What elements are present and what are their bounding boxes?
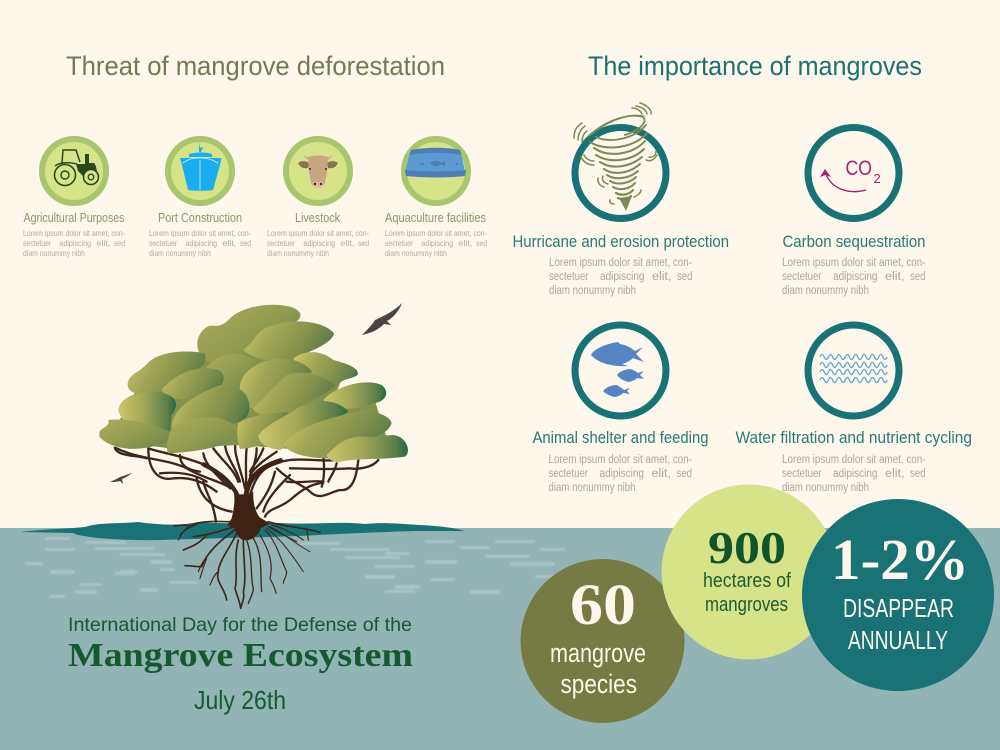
body text: Lorem ipsum dolor sit amet, con- (782, 454, 926, 466)
stat: 1-2% disappear annually: DISAPPEAR (843, 593, 954, 623)
body text (782, 454, 926, 494)
heading: Hurricane and erosion protection (512, 232, 729, 251)
body text (782, 257, 926, 297)
body text: sed (676, 468, 692, 480)
body text: sectetuer (548, 468, 588, 480)
body text: adipiscing (600, 468, 644, 480)
importance: animal shelter (532, 325, 708, 494)
stat: 1-2% disappear annually (802, 499, 994, 691)
body text: sed (910, 468, 926, 480)
stat: 1-2% disappear annually: 1-2% (831, 527, 969, 592)
body text: diam nonummy nibh (267, 248, 329, 258)
icon: cow (286, 139, 350, 203)
body text (549, 257, 692, 297)
body text: diam nonummy nibh (782, 482, 869, 494)
body text: adipiscing (833, 271, 878, 283)
bird: large (362, 303, 402, 335)
heading: Carbon sequestration (782, 232, 926, 251)
body text: Lorem ipsum dolor sit amet, con- (267, 228, 369, 238)
body text: sed (677, 271, 692, 283)
trunk and root crown (227, 492, 270, 540)
body text: diam nonummy nibh (149, 248, 211, 258)
body text: adipiscing (600, 271, 644, 283)
body text: sectetuer (549, 271, 589, 283)
body text: elit, (96, 238, 110, 248)
body text: diam nonummy nibh (385, 248, 447, 258)
stat: 60 mangrove species (520, 559, 684, 723)
body text: Lorem ipsum dolor sit amet, con- (23, 228, 125, 238)
body text: diam nonummy nibh (23, 248, 85, 258)
body text: elit, (652, 271, 672, 283)
body text: elit, (458, 238, 472, 248)
event title: International Day for the Defense of the (68, 614, 412, 636)
event title (68, 614, 413, 715)
body text (267, 228, 369, 258)
body text (23, 228, 125, 258)
body text: sectetuer (385, 238, 413, 248)
mangrove tree illustration (99, 305, 408, 608)
threat: agricultural purposes (23, 139, 125, 258)
importance: hurricane (512, 103, 729, 297)
teal shoreline (20, 522, 465, 540)
body text: diam nonummy nibh (549, 285, 636, 297)
icon: ring and fish (575, 325, 666, 416)
body text: adipiscing (59, 238, 91, 248)
canopy (99, 305, 408, 462)
body text: elit, (340, 238, 354, 248)
body text: sed (114, 238, 125, 248)
title: importance: The importance of mangroves (588, 51, 922, 81)
branches (115, 438, 378, 522)
stat: 1-2% disappear annually: ANNUALLY (848, 625, 948, 655)
stat: 900 hectares: hectares of (703, 570, 791, 592)
stat: 60 mangrove species: species (560, 669, 637, 699)
threat: livestock (267, 139, 369, 258)
body text: sectetuer (267, 238, 295, 248)
icon: ring and CO2 arrow: CO (846, 157, 872, 180)
body text (548, 454, 692, 494)
body text: elit, (885, 271, 904, 283)
body text (149, 228, 251, 258)
heading: Water filtration and nutrient cycling (736, 428, 972, 447)
threat: port construction (149, 139, 251, 258)
body text: adipiscing (833, 468, 878, 480)
bird: small (110, 473, 132, 484)
body text: Lorem ipsum dolor sit amet, con- (385, 228, 487, 238)
stat: 900 hectares (662, 484, 836, 660)
title: threat: Threat of mangrove deforestation (66, 51, 445, 81)
body text: Lorem ipsum dolor sit amet, con- (149, 228, 251, 238)
body text: sectetuer (782, 271, 822, 283)
body text: adipiscing (185, 238, 217, 248)
body text (385, 228, 487, 258)
body text: elit, (222, 238, 236, 248)
heading: Animal shelter and feeding (532, 428, 708, 447)
water area (0, 528, 1000, 750)
event title: Mangrove Ecosystem (68, 637, 413, 674)
stat: 60 mangrove species: 60 (570, 572, 636, 637)
stat: 60 mangrove species: mangrove (550, 638, 646, 668)
importance: water filtration (736, 325, 972, 494)
event title: July 26th (194, 685, 286, 715)
body text: diam nonummy nibh (782, 285, 869, 297)
roots (174, 521, 320, 608)
body text: sed (358, 238, 369, 248)
body text: sed (240, 238, 251, 248)
body text: sed (910, 271, 926, 283)
icon: ring and CO2 arrow (808, 128, 899, 218)
body text: adipiscing (421, 238, 453, 248)
stat: 900 hectares: 900 (708, 523, 786, 573)
body text: sed (476, 238, 487, 248)
body text: adipiscing (303, 238, 335, 248)
icon: ring and waves (808, 325, 899, 416)
importance: carbon (782, 128, 926, 297)
heading: Agricultural Purposes (24, 211, 124, 225)
icon: ring and tornado (574, 103, 666, 218)
body text: elit, (652, 468, 671, 480)
heading: Aquaculture facilities (385, 211, 486, 225)
body text: Lorem ipsum dolor sit amet, con- (548, 454, 692, 466)
icon: fish pond (404, 139, 468, 203)
heading: Port Construction (158, 211, 242, 225)
icon: ship (168, 139, 232, 203)
icon: tractor (42, 139, 106, 203)
body text: elit, (885, 468, 904, 480)
stat: 900 hectares: mangroves (705, 594, 788, 616)
threat: aquaculture (385, 139, 487, 258)
body text: Lorem ipsum dolor sit amet, con- (782, 257, 926, 269)
body text: sectetuer (782, 468, 822, 480)
icon: ring and CO2 arrow: 2 (874, 171, 881, 186)
body text: sectetuer (23, 238, 51, 248)
heading: Livestock (295, 211, 341, 225)
body text: diam nonummy nibh (548, 482, 636, 494)
body text: Lorem ipsum dolor sit amet, con- (549, 257, 692, 269)
body text: sectetuer (149, 238, 177, 248)
